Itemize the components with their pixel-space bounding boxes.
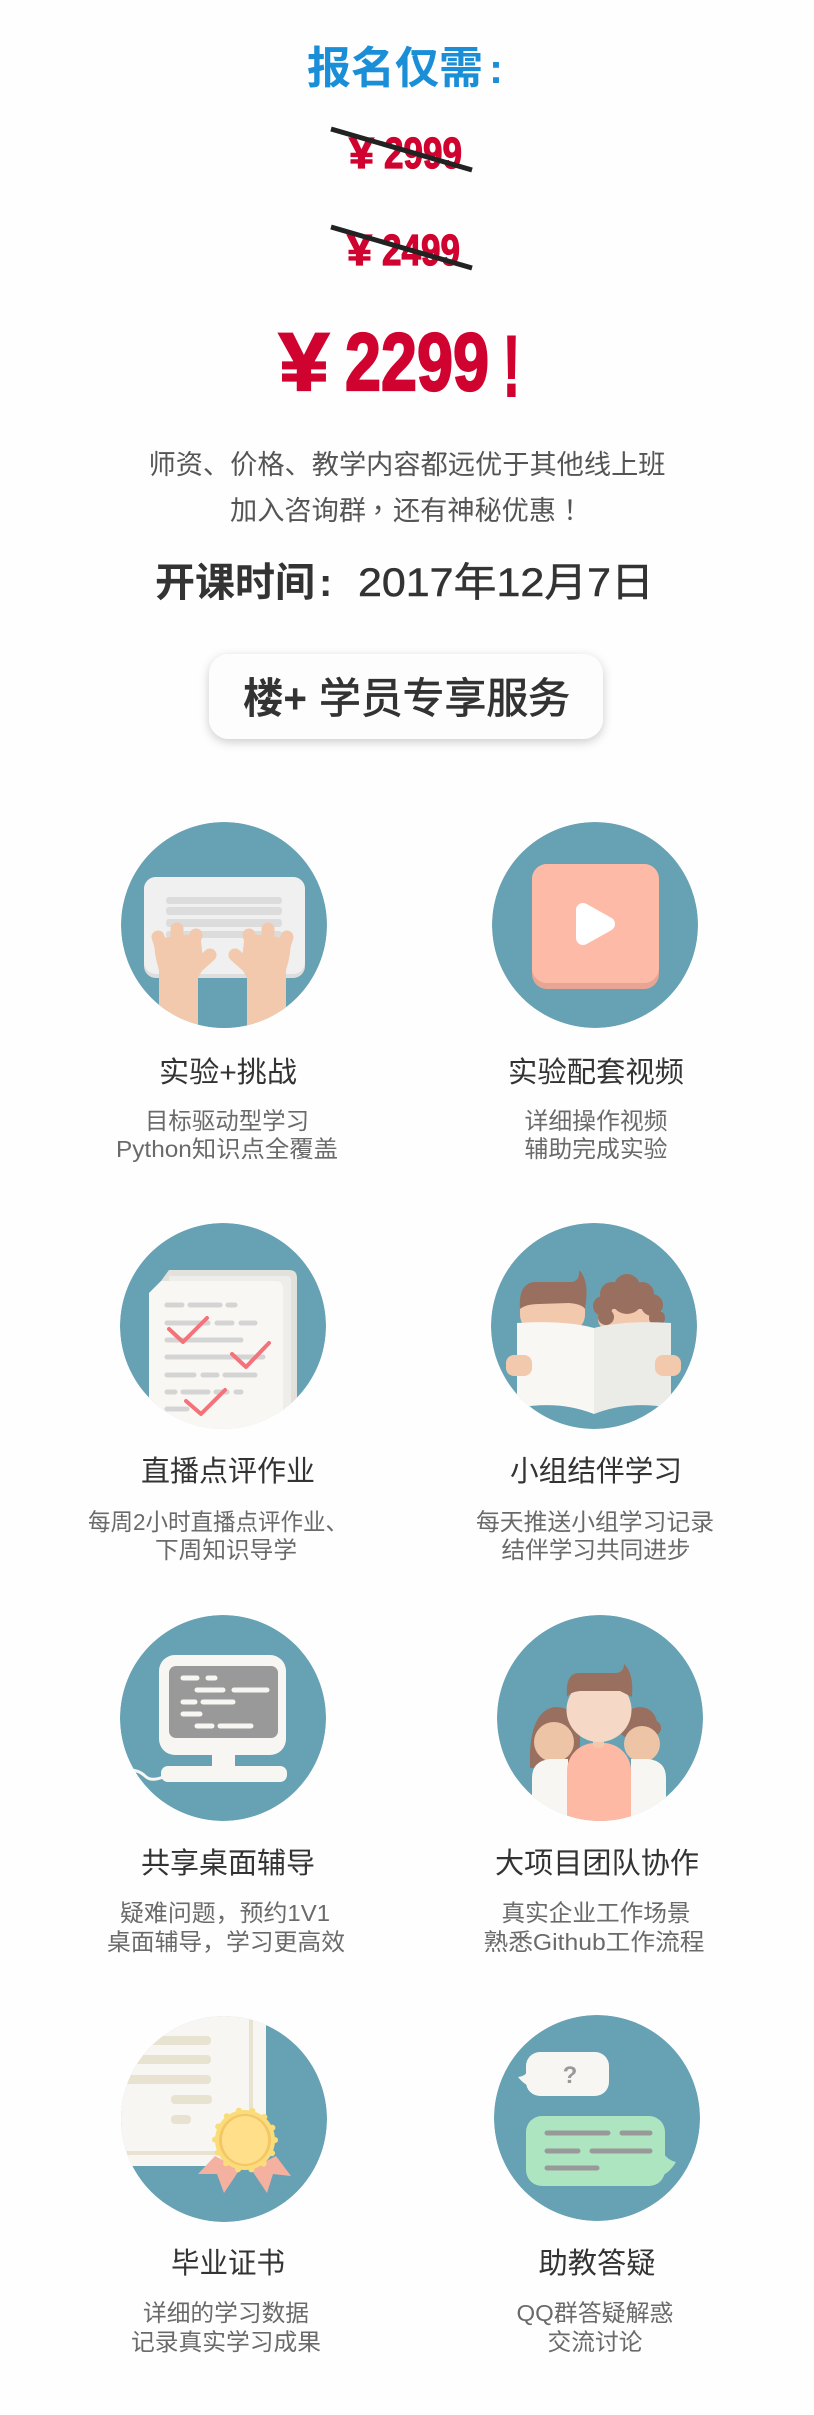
- struck price 2499: ¥: [347, 226, 373, 275]
- course start date: 2017年12月7日: [358, 561, 654, 605]
- heading: sign up price: :: [489, 45, 503, 92]
- struck price 2499: [331, 226, 472, 275]
- description: 详细的学习数据: [143, 2300, 309, 2326]
- panel: live homework review: [88, 1223, 348, 1563]
- description: 记录真实学习成果: [131, 2329, 321, 2355]
- description text: 加入咨询群: [230, 496, 366, 526]
- panel: big project teamwork: [484, 1615, 704, 1955]
- description: QQ群答疑解惑: [516, 2300, 674, 2326]
- title: 实验+挑战: [159, 1056, 297, 1089]
- description: Python知识点全覆盖: [116, 1136, 338, 1162]
- struck price 2999: [331, 129, 472, 178]
- icon: graded paper: [120, 1223, 326, 1436]
- course start date: [155, 561, 654, 605]
- title: 直播点评作业: [141, 1455, 315, 1488]
- panel: companion videos: [492, 822, 698, 1162]
- description: [516, 2300, 674, 2355]
- description: 熟悉Github工作流程: [484, 1929, 704, 1955]
- description: 桌面辅导，学习更高效: [107, 1923, 345, 1957]
- description: 每天推送小组学习记录: [476, 1509, 714, 1535]
- description: [107, 1894, 345, 1957]
- title: 大项目团队协作: [495, 1847, 699, 1880]
- final price 2299: 2299: [345, 317, 489, 408]
- description text: 还有神秘优惠: [393, 496, 556, 526]
- struck price 2499: 2499: [382, 226, 460, 275]
- description: 结伴学习共同进步: [502, 1537, 690, 1563]
- member services badge: 楼+: [243, 675, 307, 722]
- description: 真实企业工作场景: [502, 1900, 690, 1926]
- icon: chat bubbles: [494, 2015, 700, 2221]
- final price 2299: !: [503, 319, 520, 415]
- panel: graduation certificate: [114, 2009, 327, 2355]
- description: 交流讨论: [548, 2329, 642, 2355]
- course start date: 开课时间: [155, 561, 315, 605]
- icon: two readers with newspaper: [491, 1223, 697, 1429]
- course start date: :: [319, 561, 332, 605]
- title: 助教答疑: [538, 2247, 656, 2280]
- panel: shared desktop tutoring: [107, 1615, 345, 1957]
- description: [131, 2300, 321, 2355]
- description: [116, 1108, 338, 1162]
- description: 下周知识导学: [155, 1537, 297, 1563]
- final price 2299: ¥: [279, 317, 329, 408]
- title: 实验配套视频: [508, 1056, 684, 1089]
- description: 详细操作视频: [524, 1108, 668, 1134]
- description: [484, 1900, 704, 1955]
- panel: experiment + challenge: [116, 822, 338, 1162]
- description: 疑难问题，预约1V1: [120, 1894, 330, 1928]
- description text: ，: [364, 489, 392, 528]
- heading: sign up price: 报名仅需: [307, 44, 483, 93]
- final price 2299: [279, 317, 520, 415]
- icon: play button: [492, 822, 698, 1028]
- description: 辅助完成实验: [524, 1136, 668, 1162]
- description: [88, 1509, 348, 1563]
- icon: team of three: [497, 1615, 703, 1821]
- description text: ！: [556, 489, 584, 528]
- description text: 师资、价格、教学内容都远优于其他线上班: [148, 450, 666, 480]
- title: 毕业证书: [171, 2247, 285, 2280]
- description: 每周2小时直播点评作业、: [88, 1509, 348, 1535]
- description text: [148, 450, 666, 528]
- icon: computer monitor: [120, 1615, 326, 1821]
- icon: certificate and seal: [114, 2009, 327, 2222]
- title: 小组结伴学习: [510, 1455, 682, 1488]
- member services badge: [209, 654, 603, 739]
- description: [476, 1509, 714, 1563]
- struck price 2999: ¥: [349, 129, 375, 178]
- panel: teaching assistant Q&A: [494, 2015, 700, 2355]
- member services badge: 学员专享服务: [319, 675, 570, 722]
- struck price 2999: 2999: [384, 129, 462, 178]
- icon: chat bubbles: ?: [563, 2062, 577, 2089]
- title: 共享桌面辅导: [141, 1847, 315, 1880]
- description: 目标驱动型学习: [145, 1108, 309, 1134]
- description: [524, 1108, 668, 1162]
- panel: group study: [476, 1223, 714, 1563]
- icon: keyboard and hands: [121, 822, 327, 1035]
